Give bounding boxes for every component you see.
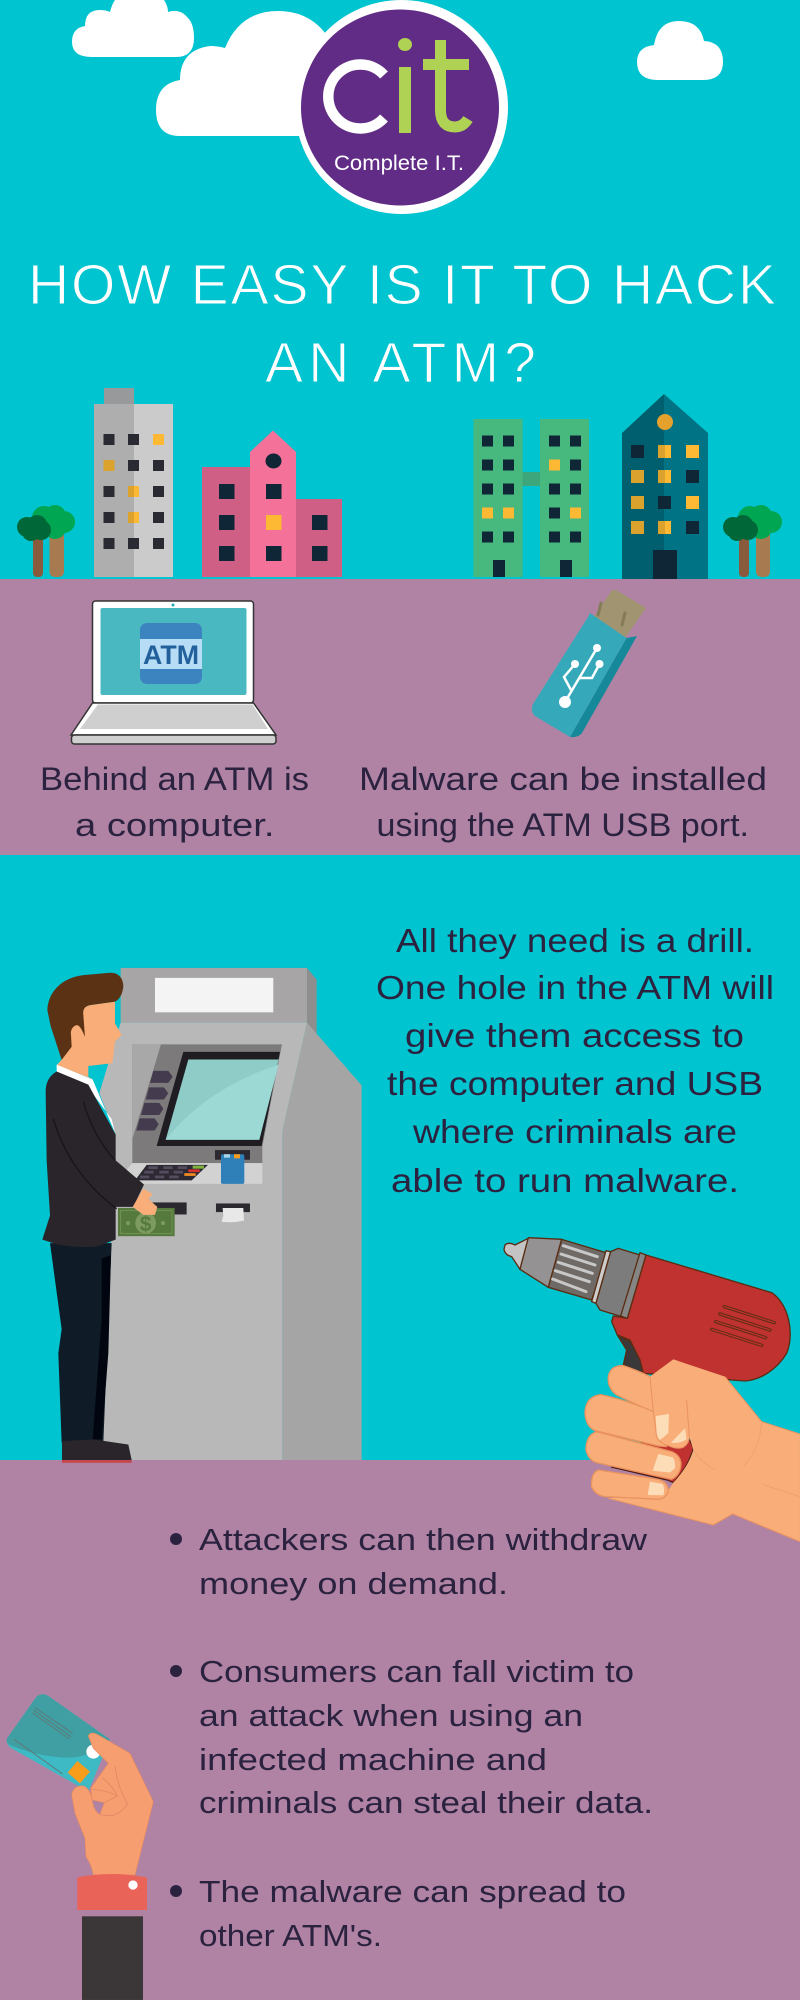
- title: HOW EASY IS IT TO HACK: [28, 253, 776, 317]
- bullet: malware spreads: other ATM's.: [199, 1918, 382, 1953]
- logo: Complete I.T.: [295, 0, 508, 214]
- text: computer and USB captions: Malware can be installed: [359, 761, 767, 797]
- bullet: consumers fall victim: an attack when using an: [199, 1698, 583, 1733]
- bullet: consumers fall victim: infected machine and: [199, 1742, 547, 1777]
- illustration: man using the ATM: [42, 973, 175, 1463]
- illustration: hand holding red drill: [504, 1238, 800, 1542]
- green twin towers: [474, 419, 589, 577]
- panel: laptop and USB band: [0, 579, 800, 855]
- text: computer and USB captions: using the ATM USB port.: [376, 807, 749, 843]
- text: drill explanation: [376, 922, 774, 1199]
- icon: USB stick: [532, 590, 646, 737]
- logo: Complete I.T.: Complete I.T.: [334, 152, 464, 175]
- illustration: ATM machine: [99, 968, 362, 1460]
- text: drill explanation: give them access to: [405, 1017, 744, 1054]
- text: computer and USB captions: [40, 761, 767, 843]
- bullet: malware spreads: [170, 1874, 626, 1953]
- bullet: consumers fall victim: [170, 1654, 653, 1820]
- bullet: consumers fall victim: criminals can steal their data.: [199, 1785, 653, 1820]
- title: [28, 253, 776, 395]
- bullet: withdraw money: money on demand.: [199, 1566, 508, 1601]
- text: computer and USB captions: Behind an ATM is: [40, 761, 309, 797]
- text: drill explanation: able to run malware.: [391, 1162, 739, 1199]
- text: computer and USB captions: a computer.: [75, 807, 274, 843]
- left trees: [17, 505, 75, 577]
- text: drill explanation: where criminals are: [412, 1113, 737, 1150]
- bullet: withdraw money: [170, 1522, 648, 1601]
- text: drill explanation: One hole in the ATM will: [376, 969, 774, 1006]
- panel: bullet list band: [0, 1460, 800, 2000]
- blue building: [622, 394, 708, 579]
- text: drill explanation: All they need is a drill.: [396, 922, 754, 959]
- pink building: [202, 430, 342, 577]
- clouds: [72, 0, 723, 136]
- title: AN ATM?: [265, 331, 536, 395]
- icon: laptop showing ATM: [71, 601, 276, 744]
- icon: laptop showing ATM: ATM: [143, 640, 199, 670]
- right trees: [723, 505, 782, 577]
- bullet: withdraw money: Attackers can then withdraw: [199, 1522, 648, 1557]
- gray tower: [94, 388, 173, 577]
- text: bullet list: [170, 1522, 653, 1953]
- illustration: hand holding bank card: [7, 1694, 153, 2000]
- text: drill explanation: the computer and USB: [387, 1065, 763, 1102]
- illustration: man using the ATM: $: [140, 1213, 152, 1236]
- bullet: malware spreads: The malware can spread to: [199, 1874, 626, 1909]
- bullet: consumers fall victim: Consumers can fall victim to: [199, 1654, 634, 1689]
